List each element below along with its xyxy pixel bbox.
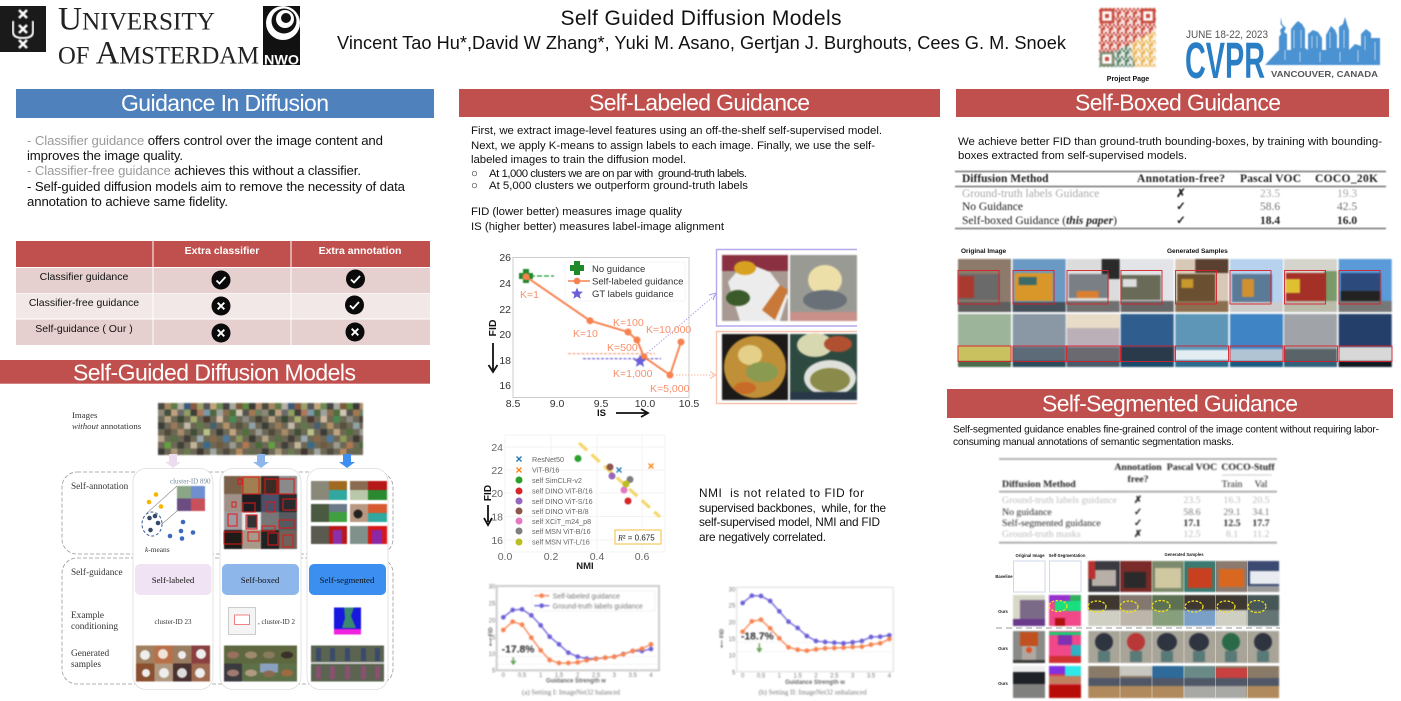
table: self-segmented FID: Ground-truth labels guidance xyxy=(1002,495,1117,506)
text block: NMI note: NMI is not related to FID for xyxy=(699,486,864,500)
text block: method: labeled images to train the diffusion model. xyxy=(471,154,686,166)
text block: method: ○ xyxy=(471,168,478,180)
callout: R squared xyxy=(615,530,661,544)
line chart: setting II unbalanced xyxy=(718,587,893,697)
heading: self-labeled guidance: Self-Labeled Guidance xyxy=(589,90,810,116)
line chart: setting I balanced xyxy=(487,585,659,697)
callout: R squared: R² = 0.675 xyxy=(617,534,655,542)
conditioning: cluster id: cluster-ID 23 xyxy=(154,618,192,626)
chart legend: No guidance xyxy=(592,264,645,275)
column cards xyxy=(133,468,388,690)
axis label: IS xyxy=(597,408,648,419)
method: self-segmented xyxy=(309,564,386,595)
method: self-boxed xyxy=(222,564,299,595)
text block: method: Next, we apply K-means to assign labels to each image. Finally, we use the self- xyxy=(471,140,875,152)
panel: self-guided diffusion models xyxy=(0,360,430,690)
panel: self-segmented guidance xyxy=(947,389,1393,698)
heading: self-segmented guidance: Self-Segmented Guidance xyxy=(1042,390,1298,416)
line chart: FID vs IS: 9.0 xyxy=(550,398,564,410)
label: images without annotations: without annotations xyxy=(72,421,141,431)
axis label: FID: FID xyxy=(487,319,499,336)
table: self-segmented FID: 23.5 xyxy=(1183,495,1201,506)
scatter chart: FID vs NMI: 22 xyxy=(491,465,503,477)
line chart: setting I balanced: 3 xyxy=(613,673,617,679)
scatter legend: ViT-B/16 xyxy=(532,466,559,474)
image grid: segmentation results xyxy=(996,561,1280,698)
method: self-labeled xyxy=(135,564,212,595)
heading: self-guided diffusion models: Self-Guided Diffusion Models xyxy=(73,360,356,386)
header: NWO logo xyxy=(263,6,300,68)
text block: method: At 1,000 clusters we are on par with ground-truth labels. xyxy=(489,168,747,180)
table: self-segmented FID: Val xyxy=(1254,479,1268,490)
table: self-boxed FID: ✓ xyxy=(1176,201,1186,213)
scatter chart: FID vs NMI: 0.4 xyxy=(590,551,604,563)
text block: guidance intro: - Classifier-free guidance achieves this without a classifier. xyxy=(27,163,361,178)
table: self-segmented FID: ✗ xyxy=(1134,495,1142,506)
generated samples: dogs xyxy=(136,646,210,682)
scatter chart: FID vs NMI: 0.0 xyxy=(498,551,512,563)
generated samples: pigs xyxy=(224,646,297,682)
QR code: project page: Project Page xyxy=(1107,76,1149,83)
text block: NMI note: supervised backbones, while, for the xyxy=(699,501,886,515)
line chart: setting II unbalanced: 2.5 xyxy=(830,674,839,680)
text block: NMI note: are negatively correlated. xyxy=(699,530,826,544)
header: NWO logo: NWO xyxy=(264,52,299,68)
text block: method: FID (lower better) measures image quality xyxy=(471,206,682,218)
table: self-segmented FID: 20.5 xyxy=(1252,495,1270,506)
line chart: setting I balanced: Self-labeled guidance xyxy=(553,593,620,600)
scatter legend: self DINO ViT-S/16 xyxy=(532,497,593,506)
image grid labels xyxy=(995,552,1204,686)
axis label: FID: FID xyxy=(483,485,494,501)
table: self-segmented FID: 11.2 xyxy=(1253,529,1269,540)
data labels: K=1,000 xyxy=(613,368,653,380)
line chart: setting I balanced: 1 xyxy=(539,673,543,679)
text block: NMI note xyxy=(699,486,886,544)
text block: self-boxed intro: We achieve better FID than ground-truth bounding-boxes, by training with bounding- xyxy=(958,136,1382,148)
self-segmented images xyxy=(311,481,387,544)
table: self-boxed FID: 23.5 xyxy=(1260,188,1280,200)
text block: self-segmented intro: consuming manual annotations of semantic segmentation masks. xyxy=(953,437,1234,448)
table: self-segmented FID: Train xyxy=(1222,479,1243,490)
line chart: setting II unbalanced: 0.5 xyxy=(757,674,766,680)
line chart: setting II unbalanced: 4 xyxy=(888,674,892,680)
row labels: Self-guidance xyxy=(71,567,123,578)
table: self-boxed FID: COCO_20K xyxy=(1315,173,1378,185)
comparison table xyxy=(16,241,430,345)
comparison table: Extra classifier xyxy=(185,245,259,257)
image grid labels: Baseline xyxy=(995,574,1013,579)
data labels xyxy=(520,289,691,395)
chart legend: Self-labeled guidance xyxy=(592,276,683,288)
table: self-segmented FID: 17.7 xyxy=(1252,518,1270,529)
sample images: self-labeled xyxy=(716,332,857,404)
scatter legend: self XCiT_m24_p8 xyxy=(532,517,591,526)
label: images without annotations: Images xyxy=(72,410,97,420)
scatter chart: FID vs NMI: 0.2 xyxy=(544,551,558,563)
scatter legend: self DINO ViT-B/8 xyxy=(532,507,589,516)
arrow: to self-labeled samples xyxy=(676,372,716,378)
line chart: setting I balanced: 5 xyxy=(492,668,496,674)
table: self-boxed FID: Annotation-free? xyxy=(1137,173,1225,185)
line chart: setting I balanced: 4 xyxy=(649,673,653,679)
table: self-boxed FID xyxy=(955,172,1386,228)
line chart: FID vs IS: 16 xyxy=(499,380,511,392)
heading: self-boxed guidance: Self-Boxed Guidance xyxy=(1075,90,1281,116)
table: self-boxed FID: 19.3 xyxy=(1337,188,1357,200)
text block: guidance intro: - Self-guided diffusion models aim to remove the necessity of data xyxy=(27,179,406,194)
CVPR 2023 logo: CVPR xyxy=(1185,32,1265,89)
line chart: setting II unbalanced: 30 xyxy=(729,587,736,593)
text block: NMI note: self-supervised model, NMI and FID xyxy=(699,515,880,529)
data labels: K=5,000 xyxy=(650,383,690,395)
line chart: setting I balanced: 30 xyxy=(489,585,496,591)
row labels: Self-annotation xyxy=(71,481,129,492)
text block: guidance intro: annotation to achieve same fidelity. xyxy=(27,194,228,209)
data labels: K=10 xyxy=(573,328,598,340)
image grid: trains xyxy=(958,259,1392,367)
comparison table: Self-guidance ( Our ) xyxy=(35,323,133,335)
table: self-boxed FID: 58.6 xyxy=(1260,201,1280,213)
text block: guidance intro xyxy=(27,133,406,209)
table: self-boxed FID: Diffusion Method xyxy=(962,173,1049,185)
text block: method: First, we extract image-level features using an off-the-shelf self-supervised model. xyxy=(471,125,882,137)
conditioning: segmentation mask xyxy=(334,608,361,634)
line chart: setting II unbalanced: 1.5 xyxy=(793,674,802,680)
line chart: setting I balanced: 15 xyxy=(489,635,496,641)
line chart: FID vs IS: 22 xyxy=(499,304,511,316)
table: self-boxed FID: 42.5 xyxy=(1337,201,1357,213)
text block: self-boxed intro: boxes extracted from self-supervised models. xyxy=(958,150,1187,162)
panel: guidance in diffusion xyxy=(16,89,434,345)
data labels: K=1 xyxy=(520,289,539,301)
table: self-segmented FID: Annotation xyxy=(1114,462,1162,473)
row labels: Generated xyxy=(71,649,110,659)
image grid labels: Generated Samples xyxy=(1164,552,1204,557)
chart legend xyxy=(565,261,685,301)
header: University of Amsterdam logo: UNIVERSITY xyxy=(58,2,215,38)
table: self-segmented FID: ✓ xyxy=(1134,518,1142,529)
heading: guidance in diffusion xyxy=(16,89,434,118)
line chart: setting II unbalanced: 3 xyxy=(851,674,855,680)
CVPR 2023 logo: VANCOUVER, CANADA xyxy=(1271,69,1378,79)
k-means illustration xyxy=(142,478,211,554)
image grid labels: Ours xyxy=(998,609,1009,614)
scatter chart: FID vs NMI: 0.6 xyxy=(635,551,649,563)
conditioning: bounding box: , cluster-ID 2 xyxy=(258,618,295,626)
table: self-boxed FID: ✗ xyxy=(1176,187,1186,200)
heading: self-boxed guidance xyxy=(956,89,1389,117)
row labels: samples xyxy=(71,660,101,670)
line chart: setting I balanced: 2 xyxy=(576,673,580,679)
data labels: K=500 xyxy=(607,342,638,354)
comparison table: Classifier guidance xyxy=(40,271,129,283)
table: self-segmented FID: Diffusion Method xyxy=(1002,479,1076,490)
heading: self-labeled guidance xyxy=(459,89,940,117)
line chart: setting I balanced: 3.5 xyxy=(629,673,637,679)
line chart: FID vs IS: 24 xyxy=(499,278,511,290)
table: self-boxed FID: Self-boxed Guidance (this paper) xyxy=(962,215,1117,227)
table: self-boxed FID: No Guidance xyxy=(962,201,1023,213)
line chart: setting I balanced: 20 xyxy=(489,618,496,624)
line chart: setting I balanced: 25 xyxy=(489,601,496,607)
CVPR 2023 logo: JUNE 18-22, 2023 xyxy=(1186,29,1268,41)
line chart: setting I balanced: 0 xyxy=(502,673,506,679)
heading: guidance in diffusion: Guidance In Diffusion xyxy=(121,90,329,116)
scatter chart: FID vs NMI: 20 xyxy=(491,488,503,500)
sample images: GT labels xyxy=(716,250,857,326)
image grid labels: Ours xyxy=(998,681,1009,686)
table: self-segmented FID: 17.1 xyxy=(1183,518,1201,529)
line chart: setting I balanced: Ground-truth labels guidance xyxy=(553,603,643,610)
table: self-segmented FID: ✓ xyxy=(1134,507,1142,518)
row labels xyxy=(71,481,129,670)
data labels: K=100 xyxy=(613,317,644,329)
method: self-labeled: Self-labeled xyxy=(152,575,195,585)
comparison table: Classifier-free guidance xyxy=(29,297,139,309)
scatter legend xyxy=(516,455,593,546)
line chart: FID vs IS: 20 xyxy=(499,329,511,341)
title: Self Guided Diffusion Models xyxy=(560,7,842,30)
scatter chart: FID vs NMI: 16 xyxy=(491,535,503,547)
line chart: setting II unbalanced: 1 xyxy=(778,674,782,680)
table: self-segmented FID: Self-segmented guidance xyxy=(1002,518,1101,529)
QR code: project page xyxy=(1099,8,1156,83)
table: self-segmented FID: No guidance xyxy=(1002,507,1052,518)
table: self-segmented FID xyxy=(999,459,1277,543)
line chart: setting I balanced: 2.5 xyxy=(592,673,601,679)
chart legend: GT labels guidance xyxy=(592,289,674,300)
line chart: FID vs IS: 9.5 xyxy=(594,398,608,410)
table: self-segmented FID: 12.5 xyxy=(1183,529,1201,540)
line chart: FID vs IS: 18 xyxy=(499,355,511,367)
text block: self-segmented intro xyxy=(953,425,1379,448)
scatter chart: FID vs NMI: 18 xyxy=(491,512,503,524)
table: self-segmented FID: 12.5 xyxy=(1223,518,1241,529)
table: self-segmented FID: 8.1 xyxy=(1226,529,1238,540)
panel: self-labeled guidance xyxy=(459,89,1393,698)
table: self-boxed FID: 18.4 xyxy=(1260,215,1280,227)
text block: method: IS (higher better) measures label-image alignment xyxy=(471,221,725,233)
text block: method: ○ xyxy=(471,180,478,192)
line chart: setting I balanced: -17.8% xyxy=(502,645,534,656)
table: self-boxed FID: 16.0 xyxy=(1337,215,1357,227)
table: self-segmented FID: free? xyxy=(1127,474,1149,485)
method: self-boxed: Self-boxed xyxy=(241,575,280,585)
text block: method: At 5,000 clusters we outperform ground-truth labels xyxy=(489,180,748,192)
axis label: IS: IS xyxy=(597,408,606,419)
text block: self-boxed intro xyxy=(958,136,1382,162)
text block: guidance intro: - Classifier guidance offers control over the image content and xyxy=(27,133,383,148)
image grid labels: Self-Segmentation xyxy=(1049,553,1086,558)
table: self-segmented FID: 16.3 xyxy=(1223,495,1241,506)
image mosaic xyxy=(158,403,363,455)
table: self-segmented FID: 29.1 xyxy=(1223,507,1241,518)
line chart: setting II unbalanced: Guidance Strength w xyxy=(785,680,845,686)
table: self-segmented FID: ✗ xyxy=(1134,529,1142,540)
axis label: NMI: NMI xyxy=(576,561,594,572)
line chart: setting I balanced: 0.5 xyxy=(518,673,527,679)
scatter legend: self MSN ViT-L/16 xyxy=(532,538,590,546)
arrow: to GT samples xyxy=(645,293,716,355)
table: self-segmented FID: 58.6 xyxy=(1183,507,1201,518)
table: self-boxed FID: ✓ xyxy=(1176,215,1186,227)
line chart: setting II unbalanced: -18.7% xyxy=(741,631,774,642)
generated samples: skaters xyxy=(311,646,384,682)
panel: self-boxed guidance xyxy=(955,89,1392,367)
line chart: setting I balanced: ⟵ FID xyxy=(487,627,494,646)
table: self-segmented FID: 34.1 xyxy=(1252,507,1270,518)
axis label: FID xyxy=(483,485,494,525)
line chart: setting I balanced: (a) Setting I: ImageNet32 balanced xyxy=(522,689,621,697)
line chart: setting II unbalanced: 20 xyxy=(729,620,736,626)
text block: method xyxy=(471,125,882,233)
row labels: conditioning xyxy=(71,622,118,632)
conditioning: bounding box xyxy=(228,608,295,634)
image grid labels: Ours xyxy=(998,646,1009,651)
row labels: Example xyxy=(71,611,104,621)
header: University of Amsterdam logo: OF AMSTERDAM xyxy=(58,36,259,72)
scatter legend: self DINO ViT-B/16 xyxy=(532,486,593,496)
line chart: FID vs IS: 26 xyxy=(499,252,511,264)
table: self-segmented FID: Pascal VOC xyxy=(1167,462,1217,473)
heading: self-guided diffusion models xyxy=(0,360,430,386)
line chart: setting II unbalanced: 10 xyxy=(729,654,736,660)
table: self-boxed FID: Ground-truth labels Guidance xyxy=(962,188,1099,200)
line chart: FID vs IS: 8.5 xyxy=(506,398,520,410)
line chart: setting II unbalanced: 0 xyxy=(741,674,745,680)
line chart: setting II unbalanced: 5 xyxy=(732,670,736,676)
table: self-segmented FID: Ground-truth masks xyxy=(1002,529,1081,540)
line chart: setting II unbalanced: (b) Setting II: ImageNet32 unbalanced xyxy=(759,689,867,697)
line chart: setting I balanced: 1.5 xyxy=(555,673,564,679)
header: University of Amsterdam logo xyxy=(0,2,259,72)
arrows to columns xyxy=(165,454,355,468)
scatter legend: ResNet50 xyxy=(532,455,564,464)
line chart: setting I balanced: Guidance Strength w xyxy=(546,678,606,684)
method: self-segmented: Self-segmented xyxy=(320,575,375,585)
table: self-segmented FID: COCO-Stuff xyxy=(1221,462,1275,473)
scatter legend: self SimCLR-v2 xyxy=(532,476,582,485)
line chart: setting II unbalanced: 25 xyxy=(729,604,736,610)
authors: Vincent Tao Hu*,David W Zhang*, Yuki M. Asano, Gertjan J. Burghouts, Cees G. M. Snoek xyxy=(337,33,1067,53)
line chart: setting II unbalanced: 15 xyxy=(729,637,736,643)
k-means illustration: k-means xyxy=(145,545,170,554)
axis label: FID xyxy=(487,319,499,372)
CVPR 2023 logo xyxy=(1185,17,1380,89)
k-means illustration: cluster-ID 890 xyxy=(170,478,211,486)
heading: self-segmented guidance xyxy=(947,389,1393,418)
line chart: setting II unbalanced: ⟵ FID xyxy=(718,629,725,648)
label: generated samples: Generated Samples xyxy=(1167,248,1228,255)
line chart: setting II unbalanced: 2 xyxy=(814,674,818,680)
text block: guidance intro: improves the image quality. xyxy=(27,148,183,163)
diagram: pipeline xyxy=(62,403,393,690)
label: original image: Original Image xyxy=(961,248,1007,255)
scatter legend: self MSN ViT-B/16 xyxy=(532,527,591,536)
text block: self-segmented intro: Self-segmented guidance enables fine-grained control of the image content without requiring labor- xyxy=(953,425,1379,436)
data labels: K=10,000 xyxy=(646,324,691,336)
self-boxed images xyxy=(224,476,297,549)
line chart: setting I balanced: 10 xyxy=(489,652,496,658)
line chart: setting II unbalanced: 3.5 xyxy=(867,674,876,680)
scatter chart: FID vs NMI: 24 xyxy=(491,442,503,454)
image grid labels: Original Image xyxy=(1015,553,1045,558)
line chart: FID vs IS: 10.0 xyxy=(635,398,655,410)
comparison table: Extra annotation xyxy=(319,245,401,257)
line chart: FID vs IS: 10.5 xyxy=(679,398,699,410)
line chart: FID vs IS xyxy=(483,250,893,697)
table: self-boxed FID: Pascal VOC xyxy=(1240,173,1301,185)
scatter chart: FID vs NMI xyxy=(483,435,665,572)
